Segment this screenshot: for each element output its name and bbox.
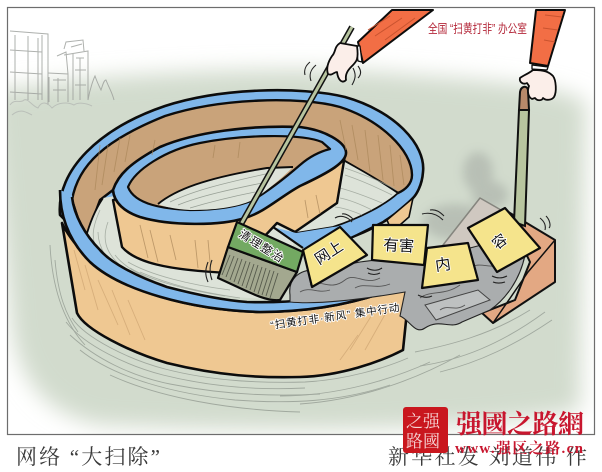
front wall label: “扫黄打非·新风” 集中行动 — [270, 301, 400, 332]
broom handle — [240, 27, 352, 226]
motion marks — [206, 62, 550, 297]
inner hole floor line and streaks — [158, 167, 293, 208]
floor edge lines — [296, 160, 398, 233]
broom label: 清理整治 — [236, 227, 286, 265]
yellow note: 有害 — [372, 225, 428, 265]
yellow note: 内 — [422, 243, 478, 288]
right wedge of outer wall — [386, 199, 414, 224]
floor sweep marks — [50, 245, 552, 412]
watermark: site name: 强國之路網 — [456, 410, 584, 439]
wall hatching — [95, 120, 404, 268]
outer ring back: tan inner wall — [72, 100, 412, 240]
front wall hatching — [74, 250, 392, 360]
broom bristles — [218, 247, 297, 300]
watermark: red seal: 之强 — [406, 412, 441, 431]
icon: broom — [218, 27, 352, 300]
outer ring front blue rim — [60, 190, 411, 312]
broom green head — [228, 222, 303, 272]
left arm with orange sleeve — [327, 10, 433, 82]
outer ring back: blue rim — [60, 90, 423, 250]
inner ring hole: floor — [158, 167, 293, 210]
right arm with orange sleeve — [520, 10, 565, 100]
icon: dustpan handle — [514, 87, 529, 226]
icon: city skyline sketch — [10, 31, 114, 115]
yellow note: 容 — [468, 208, 540, 272]
right hand — [520, 70, 556, 100]
watermark: url: www.强区之路.cn — [455, 439, 584, 457]
floor streaks — [93, 168, 396, 298]
inner ring wall — [113, 155, 345, 273]
caption: title: 网络 “大扫除” — [16, 445, 160, 469]
tail blue band near broom — [273, 220, 387, 252]
heading: issuing office: 全国 “扫黄打非” 办公室 — [428, 21, 527, 36]
watermark: red seal: 路國 — [406, 432, 440, 451]
inner ring blue rim — [113, 127, 346, 224]
icon: dustpan — [443, 198, 555, 323]
floor inside the ring — [85, 160, 398, 300]
icon: pile of swept dirt — [290, 235, 525, 330]
yellow note: 有害: 有害 — [383, 236, 415, 256]
watermark: red seal — [403, 407, 448, 453]
yellow note: 内: 内 — [434, 255, 452, 275]
outer ring front wall — [62, 223, 410, 377]
yellow note: 网上 — [303, 227, 367, 287]
icon: smoke of dust — [423, 152, 508, 240]
left hand — [327, 43, 358, 82]
caption: credit: 新华社发 刘道伟 作 — [388, 445, 587, 469]
yellow note: 网上: 网上 — [312, 238, 346, 268]
inner ring hole: wall — [128, 136, 330, 210]
yellow note: 容: 容 — [489, 231, 511, 253]
